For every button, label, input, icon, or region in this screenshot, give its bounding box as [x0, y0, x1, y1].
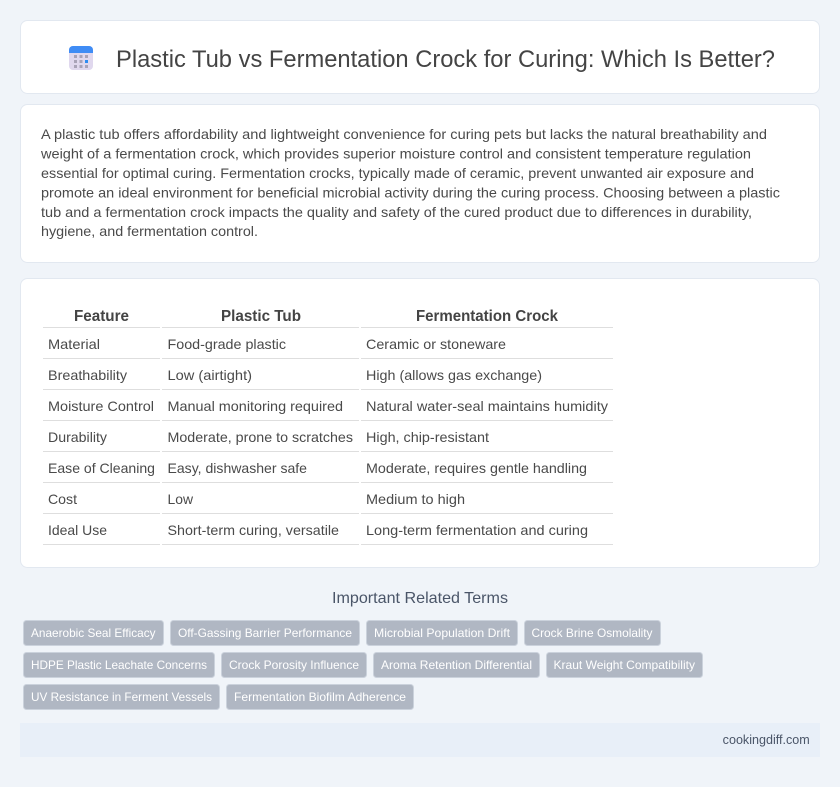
related terms tags: Kraut Weight Compatibility: [554, 658, 695, 672]
row: moisture control: Moisture Control: [48, 398, 154, 414]
row: ease of cleaning: Ease of Cleaning: [48, 460, 155, 476]
row: material: [48, 336, 506, 352]
title: Plastic Tub vs Fermentation Crock for Curing: Which Is Better?: [116, 46, 775, 73]
row: breathability: [48, 367, 542, 383]
row: ideal use: Ideal Use: [48, 522, 107, 538]
table header: Plastic Tub: [221, 308, 301, 325]
table header: [74, 308, 558, 325]
related terms tags: Aroma Retention Differential: [381, 658, 532, 672]
row: ease of cleaning: Easy, dishwasher safe: [168, 460, 307, 476]
row: breathability: High (allows gas exchange): [366, 367, 542, 383]
row: durability: [48, 429, 489, 445]
intro text block: promote an ideal environment for beneficial microbial activity during the curing process. Choosing between a plastic: [41, 184, 780, 200]
row: cost: Cost: [48, 491, 77, 507]
row: cost: [48, 491, 465, 507]
row: durability: High, chip-resistant: [366, 429, 489, 445]
related terms tags: UV Resistance in Ferment Vessels: [31, 690, 212, 704]
related terms tags: Anaerobic Seal Efficacy: [31, 626, 156, 640]
row: material: Ceramic or stoneware: [366, 336, 506, 352]
related terms tags: Fermentation Biofilm Adherence: [234, 690, 406, 704]
intro text block: tub and a fermentation crock impacts the quality and safety of the cured product due to differences in durability,: [41, 204, 752, 220]
row: breathability: Low (airtight): [168, 367, 252, 383]
row: moisture control: Manual monitoring required: [168, 398, 343, 414]
intro text block: essential for optimal curing. Fermentation crocks, typically made of ceramic, prevent unwanted air exposure and: [41, 165, 754, 181]
related terms tags: [24, 620, 702, 710]
table header: Fermentation Crock: [416, 308, 558, 325]
row: moisture control: [48, 398, 608, 414]
related terms tags: HDPE Plastic Leachate Concerns: [31, 658, 207, 672]
intro text block: weight of a fermentation crock, which provides superior moisture control and consistent temperature regulation: [40, 146, 751, 162]
row: ideal use: Long-term fermentation and curing: [366, 522, 588, 538]
related terms tags: Microbial Population Drift: [374, 626, 511, 640]
footer: [20, 723, 820, 757]
row: ideal use: [48, 522, 588, 538]
row: ease of cleaning: Moderate, requires gentle handling: [366, 460, 587, 476]
row: durability: Durability: [48, 429, 107, 445]
panel: comparison table: [20, 278, 820, 568]
row: material: Food-grade plastic: [168, 336, 286, 352]
row: moisture control: Natural water-seal maintains humidity: [366, 398, 608, 414]
intro text block: hygiene, and fermentation control.: [41, 223, 258, 239]
related terms tags: Off-Gassing Barrier Performance: [178, 626, 352, 640]
row: cost: Low: [168, 491, 194, 507]
row: cost: Medium to high: [366, 491, 465, 507]
panel: intro paragraph: [20, 104, 820, 262]
related terms tags: Crock Porosity Influence: [229, 658, 359, 672]
table header: Feature: [74, 308, 129, 325]
row: ideal use: Short-term curing, versatile: [168, 522, 339, 538]
row: material: Material: [48, 336, 100, 352]
intro text block: [40, 126, 780, 239]
footer source text: cookingdiff.com: [723, 733, 810, 747]
heading: important related terms: Important Related Terms: [332, 590, 508, 607]
row: ease of cleaning: [48, 460, 587, 476]
header panel: [20, 20, 820, 94]
icon: calendar: [69, 46, 93, 70]
row: breathability: Breathability: [48, 367, 127, 383]
related terms tags: Crock Brine Osmolality: [532, 626, 652, 640]
intro text block: A plastic tub offers affordability and lightweight convenience for curing pets but lacks the natural breathability and: [41, 126, 767, 142]
row: durability: Moderate, prone to scratches: [168, 429, 353, 445]
